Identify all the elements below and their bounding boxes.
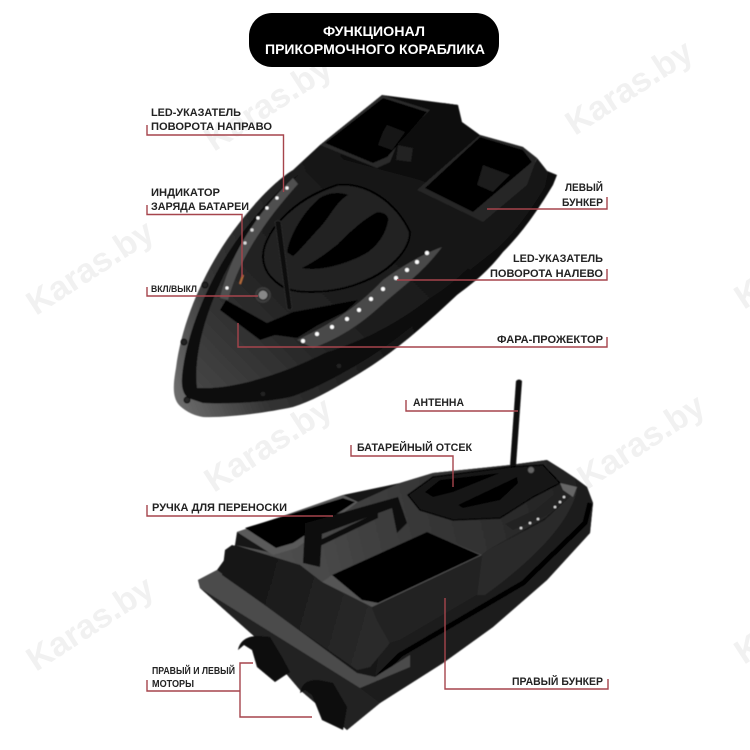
power button bbox=[528, 466, 534, 474]
battery indicator bbox=[240, 275, 243, 284]
right bunker bbox=[322, 532, 482, 643]
deck bbox=[235, 460, 577, 582]
rim screws bbox=[181, 282, 342, 403]
hull band bbox=[375, 503, 590, 680]
left rear bunker bbox=[237, 495, 358, 555]
label: left hopper: ЛЕВЫЙ bbox=[565, 181, 603, 194]
bottom LED strip bbox=[505, 490, 567, 530]
label: battery compartment: БАТАРЕЙНЫЙ ОТСЕК bbox=[357, 441, 472, 454]
front window bbox=[560, 483, 577, 497]
stern wall bbox=[200, 588, 443, 730]
hull silhouette bbox=[198, 460, 593, 730]
bottom antenna bbox=[510, 380, 522, 466]
label: battery indicator bbox=[147, 187, 249, 277]
watermarks: Karas.by bbox=[20, 213, 161, 323]
hatch slots bbox=[425, 473, 500, 497]
power switch bbox=[255, 287, 271, 303]
label: right hopper bbox=[445, 598, 608, 689]
label: LED right bbox=[147, 107, 284, 192]
label: left hopper: БУНКЕР bbox=[562, 197, 603, 209]
watermarks: Karas.by bbox=[559, 33, 700, 143]
hull rim bbox=[174, 95, 557, 417]
label: motors: МОТОРЫ bbox=[152, 679, 194, 690]
right bunker bbox=[417, 135, 537, 222]
label: motors: ПРАВЫЙ И ЛЕВЫЙ bbox=[152, 664, 235, 677]
top antenna bbox=[275, 220, 292, 310]
flange bbox=[198, 570, 410, 688]
label: battery indicator: ИНДИКАТОР bbox=[151, 187, 220, 199]
label: carry handle: РУЧКА ДЛЯ ПЕРЕНОСКИ bbox=[152, 502, 287, 514]
front light block bbox=[220, 300, 358, 340]
label: motors bbox=[147, 663, 312, 717]
label: battery indicator: ЗАРЯДА БАТАРЕИ bbox=[151, 201, 249, 213]
label: headlight: ФАРА-ПРОЖЕКТОР bbox=[497, 334, 603, 346]
label: left hopper bbox=[487, 181, 607, 209]
label: LED right: ПОВОРОТА НАПРАВО bbox=[151, 121, 272, 133]
side panel bbox=[477, 490, 577, 595]
title: ФУНКЦИОНАЛ bbox=[323, 23, 425, 39]
label: LED left: ПОВОРОТА НАЛЕВО bbox=[490, 268, 603, 280]
watermarks: Karas.by bbox=[571, 387, 712, 497]
right LED strip bbox=[297, 247, 442, 348]
right motor bbox=[300, 680, 347, 730]
carrying handle bbox=[303, 497, 407, 567]
stern wall bbox=[447, 158, 548, 270]
top boat bbox=[174, 95, 557, 417]
label: LED left bbox=[397, 253, 607, 280]
label: right hopper: ПРАВЫЙ БУНКЕР bbox=[512, 675, 603, 688]
label: on/off bbox=[147, 284, 258, 296]
watermarks: Karas.by bbox=[198, 49, 339, 159]
label: antenna bbox=[406, 397, 518, 411]
hatch bbox=[263, 185, 410, 292]
hatch slots bbox=[287, 193, 348, 256]
deck bbox=[196, 155, 505, 388]
hatch bbox=[408, 465, 560, 520]
title: ПРИКОРМОЧНОГО КОРАБЛИКА bbox=[265, 41, 485, 57]
inner underside bbox=[182, 160, 548, 403]
label: battery compartment bbox=[351, 441, 472, 487]
label: antenna: АНТЕННА bbox=[413, 397, 464, 409]
watermarks: Karas.by bbox=[20, 569, 161, 679]
label: LED left: LED-УКАЗАТЕЛЬ bbox=[513, 253, 603, 265]
label: on/off: ВКЛ/ВЫКЛ bbox=[151, 284, 197, 294]
stern box bbox=[222, 545, 390, 670]
watermarks: Karas.by bbox=[198, 390, 339, 500]
bottom boat bbox=[198, 380, 593, 730]
label: headlight bbox=[238, 323, 607, 347]
label: carry handle bbox=[147, 502, 333, 516]
title bbox=[249, 13, 499, 67]
left bunker bbox=[320, 95, 430, 168]
right hull bbox=[360, 478, 593, 703]
label: LED right: LED-УКАЗАТЕЛЬ bbox=[151, 107, 241, 119]
left motor bbox=[238, 636, 290, 682]
left LED strip bbox=[220, 178, 298, 300]
handle bbox=[392, 103, 460, 173]
